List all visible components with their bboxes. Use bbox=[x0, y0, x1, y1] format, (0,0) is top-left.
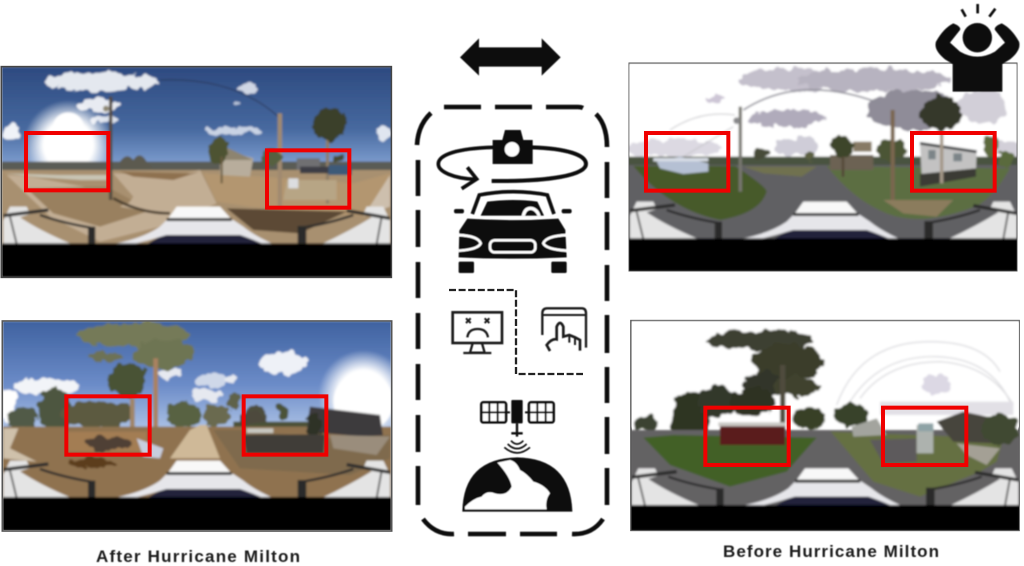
icon: earth dome bbox=[462, 457, 572, 512]
red highlight box: glare area bbox=[26, 133, 108, 190]
red highlight box: empty lot bbox=[244, 396, 326, 455]
dotted connector line bbox=[449, 290, 583, 374]
panel: before hurricane, bottom right bbox=[620, 321, 1020, 531]
street view panorama bbox=[0, 321, 408, 531]
icon: satellite bbox=[481, 400, 554, 453]
red highlight box: intact red house bbox=[705, 408, 789, 465]
panel: after hurricane, bottom left bbox=[0, 321, 408, 531]
icon: touch screen hand bbox=[542, 308, 586, 351]
dashed rounded container bbox=[417, 107, 607, 534]
icon: shocked person bbox=[936, 4, 1019, 92]
street view panorama bbox=[620, 321, 1020, 531]
red highlight box: intact lot and sign bbox=[883, 408, 966, 465]
red highlight box: intact raised house bbox=[912, 133, 995, 191]
panel: after hurricane, top left bbox=[0, 67, 393, 277]
icon: 360 camera rotating bbox=[438, 130, 586, 189]
icon: failed monitor bbox=[453, 312, 502, 353]
caption: after: After Hurricane Milton bbox=[96, 547, 300, 566]
red highlight box: intact house bbox=[646, 133, 728, 191]
street view panorama bbox=[620, 63, 1023, 272]
street view panorama bbox=[0, 67, 393, 277]
icon: car front view bbox=[454, 192, 572, 273]
red highlight box: stripped lot bbox=[66, 396, 150, 455]
panel: before hurricane, top right bbox=[620, 63, 1023, 272]
caption: before: Before Hurricane Milton bbox=[723, 542, 939, 561]
icon: double-headed comparison arrow bbox=[460, 38, 561, 76]
red highlight box: damaged house bbox=[267, 150, 349, 208]
